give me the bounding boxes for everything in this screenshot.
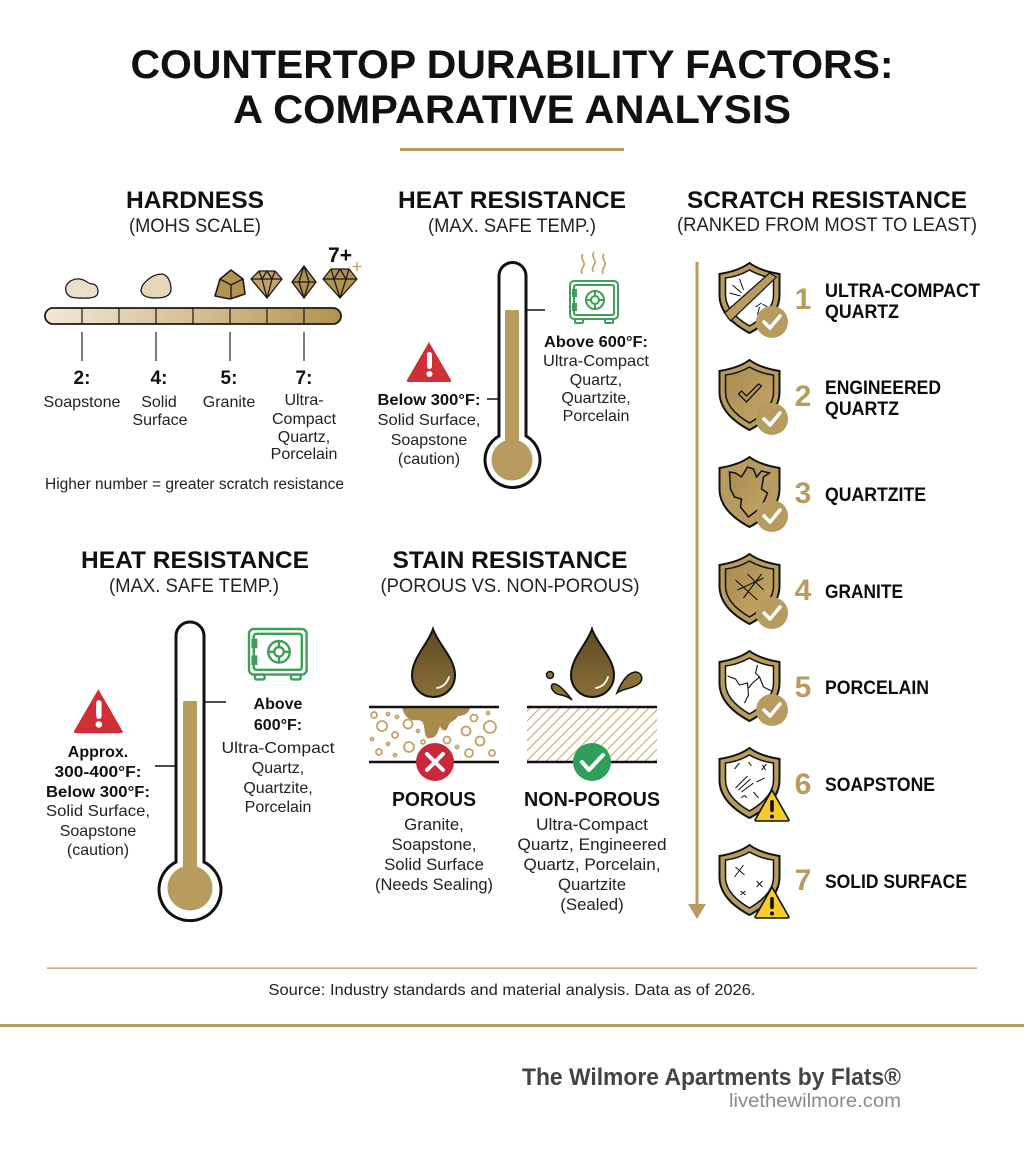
text: approx 300-400: Approx. — [68, 744, 128, 761]
rank 2: 2 — [795, 380, 811, 413]
footer brand: livethewilmore.com — [729, 1091, 901, 1112]
heading: stain resistance — [380, 547, 640, 597]
rank 5: PORCELAIN — [825, 678, 929, 699]
text: porous: Granite, — [404, 815, 464, 834]
panel: heat resistance top — [378, 187, 650, 487]
scale labels: Soapstone — [44, 394, 121, 411]
title: A COMPARATIVE ANALYSIS — [233, 88, 791, 132]
rank 7 — [720, 845, 967, 918]
text: non-porous: NON-POROUS — [524, 789, 660, 811]
text: approx 300-400 — [46, 744, 150, 859]
heading: scratch resistance — [677, 187, 977, 236]
text: below 300 — [378, 392, 480, 468]
text: above 600: 600°F: — [254, 717, 302, 734]
label: 7+ — [328, 244, 362, 271]
text: below 300: (caution) — [398, 451, 460, 468]
scale labels — [44, 368, 337, 463]
rank 7: 7 — [795, 864, 811, 897]
rank 4: 4 — [795, 574, 812, 607]
text: approx 300-400: Solid Surface, — [46, 803, 150, 820]
rank 5: 5 — [795, 671, 811, 704]
panel: stain resistance — [369, 547, 666, 914]
rank 7: SOLID SURFACE — [825, 872, 967, 893]
text: above 600: Ultra-Compact — [543, 353, 650, 370]
icon: warning — [407, 342, 451, 382]
rank 3: 3 — [795, 477, 811, 510]
title: COUNTERTOP DURABILITY FACTORS: — [130, 43, 894, 87]
text: above 600: Quartzite, — [561, 390, 631, 407]
rank 3 — [720, 457, 926, 532]
icon: steam — [582, 252, 605, 274]
scale labels: Surface — [132, 412, 188, 429]
text: approx 300-400: Below 300°F: — [46, 784, 150, 801]
text: above 600: Ultra-Compact — [222, 740, 335, 757]
scale labels: Ultra- — [284, 392, 324, 409]
scale labels: 7: — [296, 368, 312, 389]
text: above 600: Above — [254, 696, 303, 713]
text: above 600: Above 600°F: — [544, 334, 648, 351]
scale labels: 5: — [221, 368, 237, 389]
text: approx 300-400: (caution) — [67, 842, 129, 859]
rank 2: ENGINEERED — [825, 378, 941, 399]
scale note: Higher number = greater scratch resistance — [45, 476, 344, 493]
rank 1 — [720, 263, 980, 338]
text: non-porous: (Sealed) — [560, 895, 624, 914]
rank 2: QUARTZ — [825, 399, 899, 420]
text: above 600: Porcelain — [563, 408, 629, 425]
arrow: most to least — [688, 262, 706, 919]
rank 6: 6 — [795, 768, 811, 801]
text: below 300: Solid Surface, — [378, 412, 480, 429]
heading: heat resistance: (MAX. SAFE TEMP.) — [109, 576, 279, 597]
text: porous: Solid Surface — [384, 855, 484, 874]
heading: hardness: (MOHS SCALE) — [129, 216, 261, 237]
text: approx 300-400: Soapstone — [60, 823, 136, 840]
diagram: porous — [369, 629, 499, 781]
icon: warning — [74, 689, 123, 733]
icons: stones and gems — [66, 266, 357, 299]
heading: stain resistance: (POROUS VS. NON-POROUS) — [380, 576, 640, 597]
source note: Source: Industry standards and material analysis. Data as of 2026. — [268, 982, 756, 999]
rank 5 — [720, 651, 929, 726]
text: approx 300-400: 300-400°F: — [54, 764, 142, 781]
text: porous: POROUS — [392, 789, 476, 811]
title underline — [400, 148, 624, 151]
text: below 300: Below 300°F: — [378, 392, 480, 409]
text: porous — [375, 789, 493, 894]
diagram: non-porous — [527, 629, 657, 781]
text: above 600: Porcelain — [245, 799, 311, 816]
rank 1: 1 — [795, 283, 811, 316]
heading: heat resistance: HEAT RESISTANCE — [398, 187, 626, 214]
thermometer — [155, 622, 226, 921]
heading: heat resistance: (MAX. SAFE TEMP.) — [428, 216, 596, 237]
text: above 600 — [543, 334, 650, 425]
rank 6 — [720, 748, 935, 821]
scale labels: 2: — [74, 368, 90, 389]
icon: safe — [570, 281, 618, 323]
rank 3: QUARTZITE — [825, 485, 926, 506]
panel: hardness — [44, 187, 362, 493]
text: non-porous — [518, 789, 666, 914]
heading: hardness — [126, 187, 264, 237]
text: porous: (Needs Sealing) — [375, 875, 493, 894]
text: porous: Soapstone, — [392, 835, 476, 854]
rank 2 — [720, 360, 941, 435]
text: above 600: Quartz, — [570, 372, 622, 389]
icon: safe — [249, 629, 307, 679]
text: non-porous: Ultra-Compact — [536, 815, 648, 834]
heading: hardness: HARDNESS — [126, 187, 264, 214]
scale labels: 4: — [151, 368, 167, 389]
text: non-porous: Quartz, Porcelain, — [524, 855, 660, 874]
rank 4 — [720, 554, 903, 629]
hardness scale bar — [45, 308, 341, 324]
panel: scratch resistance — [677, 187, 980, 919]
text: non-porous: Quartzite — [558, 875, 626, 894]
rank 6: SOAPSTONE — [825, 775, 935, 796]
footer brand — [522, 1064, 901, 1112]
scale labels: Compact — [272, 411, 337, 428]
title — [130, 43, 894, 132]
footer brand: The Wilmore Apartments by Flats® — [522, 1064, 901, 1091]
text: below 300: Soapstone — [391, 432, 467, 449]
scale labels: Quartz, — [278, 429, 330, 446]
text: above 600: Quartz, — [252, 760, 304, 777]
scale labels: Granite — [203, 394, 255, 411]
heading: scratch resistance: SCRATCH RESISTANCE — [687, 187, 967, 214]
heading: stain resistance: STAIN RESISTANCE — [392, 547, 628, 574]
panel: heat resistance bottom — [46, 547, 335, 921]
rank 4: GRANITE — [825, 582, 903, 603]
text: above 600: Quartzite, — [243, 780, 313, 797]
text: above 600 — [222, 696, 335, 816]
scale labels: Solid — [141, 394, 177, 411]
rank 1: QUARTZ — [825, 302, 899, 323]
scale labels: Porcelain — [271, 446, 337, 463]
heading: heat resistance: HEAT RESISTANCE — [81, 547, 309, 574]
text: non-porous: Quartz, Engineered — [518, 835, 666, 854]
heading: heat resistance — [81, 547, 309, 597]
heading: heat resistance — [398, 187, 626, 237]
heading: scratch resistance: (RANKED FROM MOST TO LEAST) — [677, 215, 977, 236]
thermometer — [485, 262, 545, 487]
rank 1: ULTRA-COMPACT — [825, 281, 980, 302]
label: 7+: 7+ — [328, 244, 352, 267]
